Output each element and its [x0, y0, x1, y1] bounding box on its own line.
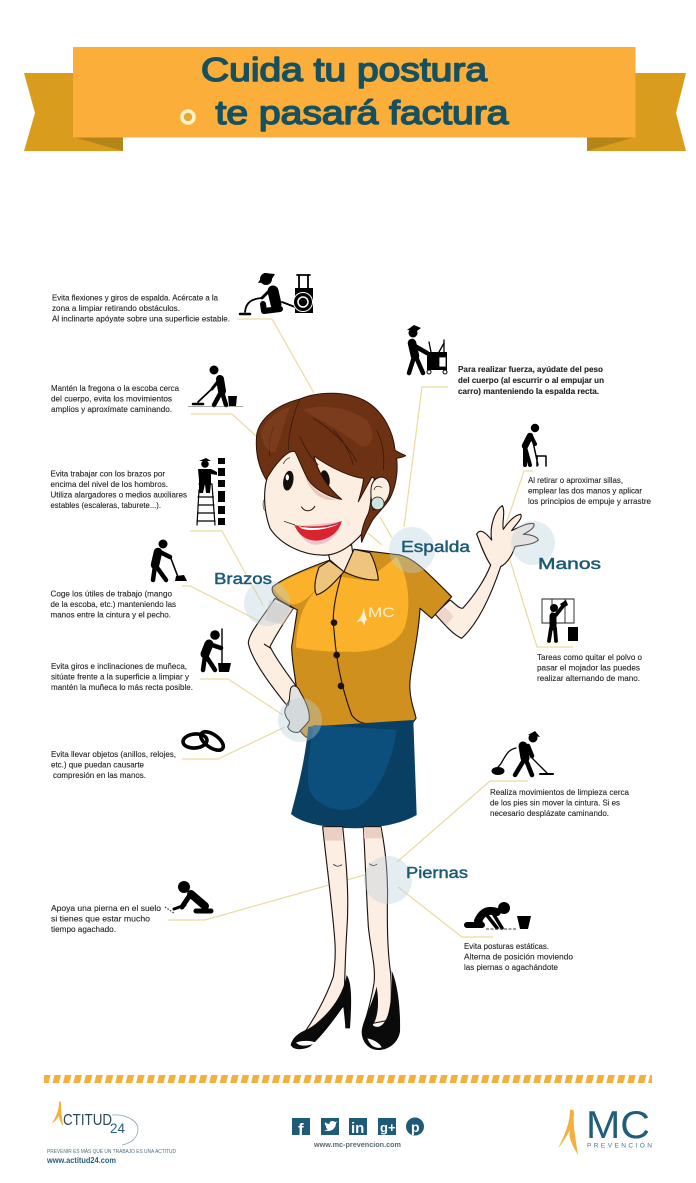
icon: crawling worker with bucket: [467, 902, 531, 929]
text block: posturas: [464, 941, 573, 972]
icon: crouching with machine: [240, 273, 313, 314]
shirt logo: MC: [368, 604, 395, 620]
text block: sillas: Al retirar o aproximar sillas,: [528, 475, 623, 485]
logo: MC Prevencion: MC: [586, 1104, 650, 1147]
text block: utiles: de la escoba, etc.) manteniendo las: [50, 599, 176, 609]
character: [248, 393, 538, 741]
title text: [201, 51, 509, 131]
skirt: [291, 720, 417, 1050]
text block: polvo: pasar el mojador las puedes: [537, 662, 640, 672]
text block: movimientos: [490, 787, 629, 818]
shirt placket and buttons: [333, 574, 368, 724]
icon: broom: [153, 540, 187, 581]
title banner: [24, 47, 686, 151]
right earring: [371, 497, 384, 510]
social icons: in: [351, 1120, 364, 1137]
face: [265, 433, 375, 555]
website url: www.mc-prevencion.com: [313, 1140, 401, 1149]
text block: polvo: realizar alternando de mano.: [537, 673, 640, 683]
text block: brazos en alto: Evita trabajar con los brazos por: [50, 468, 165, 478]
text block: utiles: Coge los útiles de trabajo (mango: [50, 588, 172, 598]
text block: polvo: Tareas como quitar el polvo o: [537, 652, 642, 662]
text block: brazos en alto: [50, 468, 187, 510]
shirt highlight: [296, 557, 408, 652]
icon: ladder and shelf: [197, 458, 225, 525]
text block: objetos: Evita llevar objetos (anillos, relojes,: [51, 749, 176, 759]
face shadow under fringe: [303, 470, 337, 500]
logo: MC Prevencion: [558, 1104, 652, 1155]
right shoe: [362, 971, 400, 1050]
logo: Actitud 24: 24: [110, 1120, 125, 1136]
text block: polvo: [537, 652, 642, 683]
highlight circles: [244, 521, 555, 904]
title text: te pasará factura: [216, 94, 509, 131]
heading: Piernas: Piernas: [406, 865, 468, 882]
social icons: g+: [380, 1120, 396, 1135]
heading: Manos: Manos: [538, 556, 601, 573]
logo: Actitud 24: CTITUD: [63, 1112, 112, 1129]
icon: wrist cleaning: [203, 629, 231, 672]
mouth: [284, 521, 342, 545]
text block: pierna: [51, 903, 161, 934]
text block: muneca: [51, 661, 193, 692]
text block: flexiones: [52, 292, 230, 324]
text block: brazos en alto: estables (escaleras, taburete...).: [50, 500, 161, 510]
text block: sillas: [528, 475, 651, 506]
text block: pierna: tiempo agachado.: [51, 924, 116, 934]
right arm and hand: [435, 506, 538, 638]
icon: mopping: [188, 366, 243, 406]
text block: posturas: las piernas o agachándote: [464, 962, 558, 972]
hair: [256, 393, 406, 542]
text block: flexiones: Evita flexiones y giros de espalda. Acércate a la: [52, 292, 218, 302]
text block: brazos en alto: encima del nivel de los hombros.: [50, 479, 168, 489]
text block: sillas: emplear las dos manos y aplicar: [528, 486, 642, 496]
text block: movimientos: necesario desplázate caminando.: [490, 808, 609, 818]
eyes: [282, 458, 331, 491]
text block: fregona: del cuerpo, evita los movimientos: [51, 394, 172, 404]
left shoe: [291, 975, 351, 1049]
icon: title ring: [182, 111, 194, 123]
social icons: [292, 1118, 424, 1139]
text block: movimientos: de los pies sin mover la cintura. Si es: [490, 798, 620, 808]
logo: Actitud 24: [46, 1101, 176, 1165]
left arm: [248, 598, 297, 705]
leader lines: [168, 319, 573, 937]
text block: brazos en alto: Utiliza alargadores o medios auxiliares: [50, 490, 187, 500]
text block: fuerza: Para realizar fuerza, ayúdate del peso: [458, 364, 603, 374]
left earring: [263, 498, 268, 511]
nose: [301, 506, 315, 511]
left hand: [285, 686, 309, 732]
text block: fregona: [51, 383, 179, 414]
icon: chair: [525, 424, 546, 466]
heading: Espalda: Espalda: [401, 539, 470, 556]
logo: Actitud 24: PREVENIR ES MÁS QUE UN TRABAJO ES UNA ACTITUD: [47, 1148, 176, 1155]
icon: vacuum: [492, 731, 553, 775]
social icons: p: [411, 1119, 420, 1135]
hair strands: [269, 399, 384, 470]
dashed footer divider: [44, 1075, 652, 1083]
icon: window: [542, 599, 578, 641]
text block: objetos: compresión en las manos.: [53, 770, 146, 780]
text block: fregona: amplios y aproxímate caminando.: [51, 404, 172, 414]
text block: posturas: Alterna de posición moviendo: [464, 952, 573, 962]
text block: pierna: si tienes que estar mucho: [51, 914, 150, 924]
text block: muneca: sitúate frente a la superficie a limpiar y: [51, 672, 190, 682]
legs: [305, 827, 391, 1032]
text block: objetos: etc.) que puedan causarte: [51, 760, 144, 770]
text block: flexiones: zona a limpiar retirando obstáculos.: [52, 303, 180, 313]
heading: Brazos: Brazos: [214, 571, 272, 588]
text block: utiles: [50, 588, 176, 620]
title text: Cuida tu postura: [201, 51, 488, 88]
icon: cart: [407, 325, 447, 374]
text block: posturas: Evita posturas estáticas.: [464, 941, 549, 951]
text block: muneca: Evita giros e inclinaciones de muñeca,: [51, 661, 187, 671]
neck: [327, 545, 354, 573]
text block: fregona: Mantén la fregona o la escoba cerca: [51, 383, 179, 393]
shirt: [272, 549, 452, 741]
icon: rings: [182, 728, 226, 754]
text block: fuerza: del cuerpo (al escurrir o al empujar un: [458, 375, 604, 385]
text block: movimientos: Realiza movimientos de limpieza cerca: [490, 787, 629, 797]
social icons: f: [298, 1120, 304, 1139]
text block: pierna: Apoya una pierna en el suelo: [51, 903, 161, 913]
logo: MC Prevencion: PREVENCIÓN: [587, 1140, 652, 1150]
text block: flexiones: Al inclinarte apóyate sobre una superficie estable.: [52, 314, 230, 324]
collar: [315, 549, 378, 595]
text block: fuerza: carro) manteniendo la espalda recta.: [458, 386, 599, 396]
text block: fuerza: [458, 364, 604, 396]
text block: sillas: los principios de empuje y arrastre: [528, 496, 651, 506]
icon: kneeling worker: [165, 881, 211, 913]
text block: objetos: [51, 749, 176, 780]
text block: muneca: mantén la muñeca lo más recta posible.: [51, 682, 193, 692]
shirt logo: [356, 604, 395, 626]
text block: utiles: manos entre la cintura y el pecho.: [50, 610, 171, 620]
right ear: [371, 477, 390, 510]
logo: Actitud 24: www.actitud24.com: [46, 1156, 116, 1165]
